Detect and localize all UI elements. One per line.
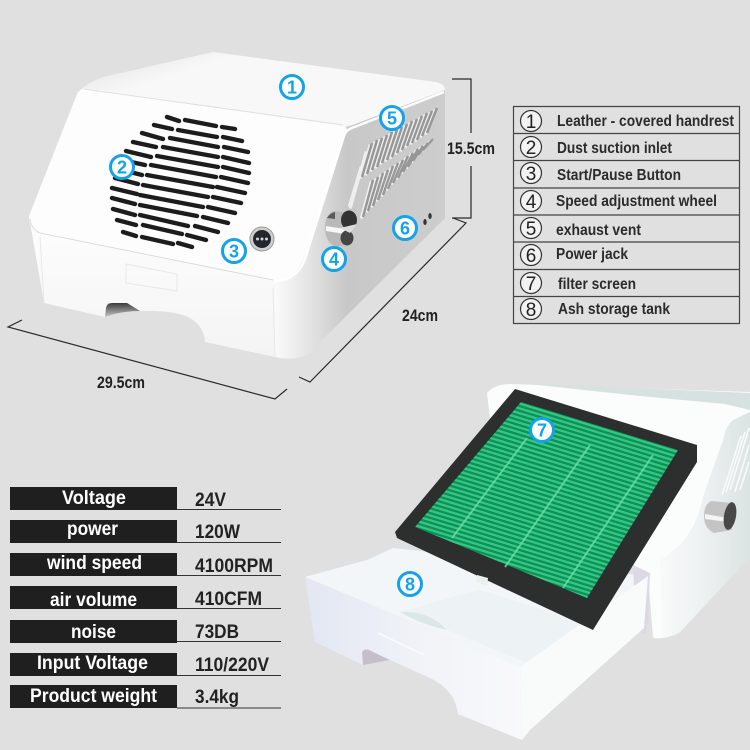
- drawer handle recess: [105, 303, 140, 317]
- handrest seam: [84, 89, 343, 125]
- callout 1: [280, 76, 304, 98]
- legend row 1: [520, 110, 735, 133]
- dimension: depth: 24cm: [402, 306, 438, 325]
- filter green base: [415, 402, 678, 598]
- dust suction grille: [112, 117, 249, 247]
- legend row 5: 5: [526, 219, 536, 240]
- legend row 3: Start/Pause Button: [557, 167, 681, 184]
- drawer right strip: [633, 565, 650, 634]
- legend row 8: 8: [526, 300, 536, 321]
- open device top band: [520, 383, 750, 410]
- spec: noise: [10, 620, 281, 643]
- product photo: open drawer and filter: [305, 367, 750, 740]
- spec: wind speed: [10, 553, 281, 577]
- spec: air volume: 410CFM: [195, 589, 262, 610]
- callout 5: [380, 106, 404, 130]
- spec: voltage: Voltage: [62, 488, 126, 509]
- drawer inner curve: [400, 612, 447, 630]
- legend table: [513, 106, 740, 324]
- callout 8: [398, 572, 422, 596]
- open device body: [487, 384, 750, 638]
- legend grid: [513, 106, 740, 324]
- legend row 5: exhaust vent: [556, 222, 642, 239]
- dimension: depth: [299, 218, 466, 382]
- filter screen frame: [395, 389, 697, 630]
- dimension: height: 15.5cm: [447, 139, 495, 158]
- dimension: width: [8, 320, 287, 399]
- spec: power: 120W: [195, 522, 240, 543]
- legend row 8: [520, 298, 670, 321]
- drawer details: [40, 237, 275, 357]
- legend row 7: filter screen: [558, 276, 636, 293]
- callout 5: 5: [387, 108, 397, 128]
- callout 3: [222, 240, 246, 262]
- drawer side wall: [520, 576, 648, 740]
- callout 8: 8: [405, 574, 415, 594]
- spec: product weight: [10, 685, 281, 708]
- spec: noise: 73DB: [195, 622, 239, 643]
- open device vents: [722, 428, 749, 495]
- callout 1: 1: [287, 78, 297, 98]
- device side face: [273, 90, 445, 359]
- device lower front: ash drawer: [30, 222, 275, 357]
- spec: product weight: Product weight: [30, 686, 158, 707]
- legend row 5: [520, 218, 642, 240]
- drawer interior shading: [400, 590, 590, 664]
- start/pause button: [250, 227, 274, 251]
- callout 6: 6: [400, 218, 410, 238]
- dimension: width: 29.5cm: [97, 373, 145, 392]
- spec: noise: noise: [71, 622, 116, 643]
- callout 6: [394, 216, 416, 240]
- spec: wind speed: 4100RPM: [195, 556, 273, 577]
- legend row 4: [520, 190, 717, 213]
- exhaust vent slats: [349, 108, 437, 218]
- drawer handle hollow: [362, 649, 390, 665]
- specification table: [10, 487, 281, 708]
- legend row 7: [520, 272, 636, 295]
- legend row 3: [520, 162, 681, 185]
- callout 2: 2: [117, 158, 127, 178]
- legend row 6: [520, 244, 628, 267]
- power jack: [423, 213, 432, 225]
- spec: air volume: [10, 586, 281, 611]
- speed adjustment wheel: [325, 210, 357, 247]
- drawer interior: [305, 548, 648, 667]
- legend row 7: 7: [526, 274, 536, 295]
- spec: voltage: [10, 487, 281, 511]
- legend row 8: Ash storage tank: [558, 301, 670, 318]
- spec: product weight: 3.4kg: [195, 687, 239, 708]
- filter frame notch: [476, 575, 488, 586]
- panel seam: [30, 219, 273, 280]
- spec: air volume: air volume: [50, 590, 137, 611]
- legend row 4: 4: [526, 192, 537, 213]
- callout 4: 4: [329, 250, 339, 270]
- open device knob: [704, 501, 738, 533]
- spec: power: [10, 519, 281, 543]
- filter pleats: [416, 402, 678, 598]
- drawer front face: [305, 577, 522, 740]
- spec: input voltage: [10, 653, 281, 676]
- legend row 2: [520, 136, 673, 159]
- callout 2: [110, 156, 134, 178]
- callout 4: [322, 248, 346, 270]
- legend row 6: Power jack: [556, 246, 628, 263]
- callout 7: [530, 418, 554, 442]
- spec: wind speed: wind speed: [46, 553, 142, 574]
- product photo: closed dust collector: [29, 52, 445, 359]
- legend row 3: 3: [526, 164, 536, 185]
- filter seams: [452, 438, 653, 588]
- legend row 2: 2: [526, 138, 536, 159]
- dimension: height: [447, 79, 495, 218]
- handrest top surface: [77, 52, 445, 126]
- side trim line: [274, 92, 444, 281]
- spec: input voltage: 110/220V: [195, 655, 269, 676]
- callout 3: 3: [229, 242, 239, 262]
- spec: power: power: [67, 519, 119, 540]
- legend row 2: Dust suction inlet: [557, 140, 673, 157]
- legend row 6: 6: [526, 246, 536, 267]
- legend row 4: Speed adjustment wheel: [556, 193, 717, 210]
- legend row 1: 1: [526, 112, 536, 133]
- spec: input voltage: Input Voltage: [37, 653, 148, 674]
- callout 7: 7: [537, 420, 547, 440]
- open device side face: [660, 412, 750, 636]
- drawer label recess: [378, 633, 424, 655]
- spec: voltage: 24V: [195, 490, 226, 511]
- front panel: [29, 89, 347, 280]
